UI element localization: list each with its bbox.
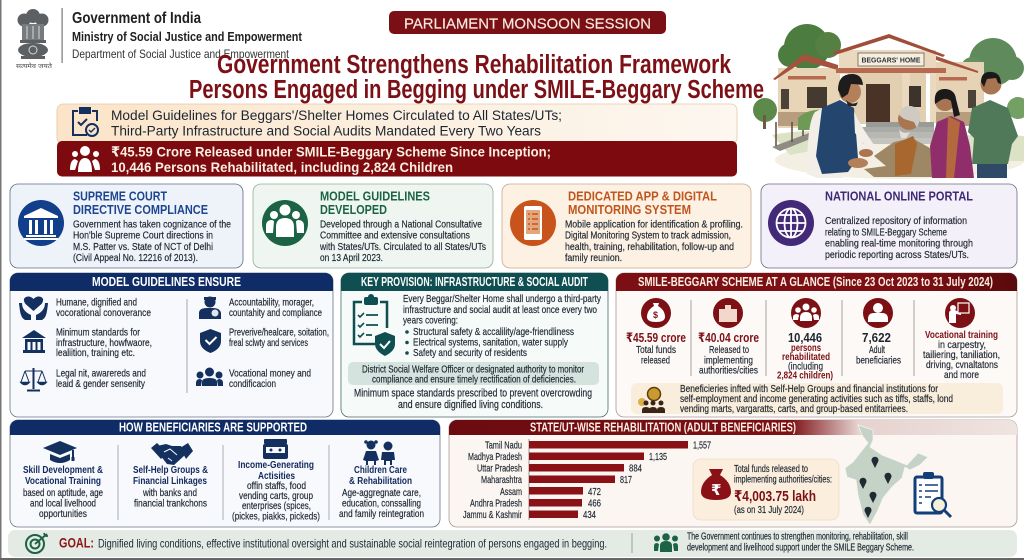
icon: checklist clipboard (73, 108, 98, 136)
text: audit requirement: years covering: (403, 314, 458, 326)
bar chart: adult beneficiaries by state (463, 439, 711, 521)
heading: DIRECTIVE COMPLIANCE (73, 203, 208, 217)
bar chart: adult beneficiaries by state: 472 (588, 486, 601, 498)
stat: persons rehabilitated: (including (788, 360, 823, 372)
body text: relating to SMILE-Beggary Scheme (825, 226, 947, 238)
icon: green people group (654, 533, 678, 552)
stat: total funds released: ₹45.59 crore (626, 330, 686, 345)
body text: enabling real-time monitoring through (825, 238, 973, 250)
icon: globe (768, 200, 814, 246)
panel: state and ut wise rehabilitation: STATE/UT-WISE REHABILITATION (ADULT BENEFICIARIES) (530, 420, 796, 434)
stat: released to authorities: implementing (704, 354, 753, 366)
body text: M.S. Patter vs. State of NCT of Delhi (73, 241, 213, 253)
heading: DEVELOPED (320, 203, 387, 217)
callout: total funds released: (as on 31 July 2024) (734, 504, 804, 516)
icon: supreme court building (18, 200, 64, 246)
callout: district social welfare officer (348, 362, 599, 386)
title: Government Strengthens Rehabilitation Framework (217, 51, 732, 79)
stat: adult beneficiaries: Adult (869, 344, 885, 356)
panel: dedicated app and digital monitoring (502, 184, 751, 268)
header: government identity: Ministry of Social Justice and Empowerment (72, 30, 303, 44)
icon: national emblem: सत्यमेव जयते (16, 62, 53, 70)
column: self-help groups (133, 443, 208, 510)
text: legal aid (56, 368, 146, 390)
panel: how beneficiaries are supported: HOW BENEFICIARIES ARE SUPPORTED (119, 420, 307, 434)
panel: supreme court directive compliance (10, 184, 243, 268)
stat: total funds released: Total funds (636, 344, 676, 356)
body text: Government has taken cognizance of the (73, 218, 231, 230)
icon: national emblem (16, 9, 53, 70)
stat: vocational training: in carpestry, (938, 339, 986, 351)
header: government identity (16, 8, 303, 70)
icon: vending stall (263, 439, 288, 459)
list: audit coverage: Safety and security of residents (413, 347, 527, 359)
text: minimum standards: Minimum standards for (56, 326, 140, 338)
map: india with location pins (845, 425, 928, 525)
text: accountability: Accountability, morager, (229, 296, 314, 308)
panel: key provision infrastructure and social audit (341, 273, 608, 417)
icon: accountable officer (199, 296, 221, 319)
bar chart: adult beneficiaries by state: Madhya Pradesh (468, 451, 522, 463)
stat: released to authorities: ₹40.04 crore (698, 330, 759, 345)
icon: rupee money bag (701, 469, 731, 500)
bar chart: adult beneficiaries by state: Jammu & Kashmir (463, 509, 522, 521)
callout: total funds released: implementing authorities/cities: (734, 474, 832, 486)
banner: model guidelines circulated: Third-Party Infrastructure and Social Audits Mandated Every Two Years (111, 122, 541, 138)
heading (73, 190, 208, 217)
body text: Developed through a National Consultative (320, 218, 482, 230)
icon: people group (70, 146, 100, 172)
icon: rupee money bag: ₹ (711, 482, 721, 499)
column: income-generating activities: offin staffs, food (247, 480, 306, 492)
body text: health, training, rehabilitation, follow-up and (565, 241, 734, 253)
callout: district social welfare officer: compliance and ensure timely rectification of deficiencies. (372, 374, 576, 386)
heading (320, 190, 430, 217)
text: preventive healthcare (229, 326, 329, 349)
text: vocational money: condificacion (229, 378, 276, 390)
title (189, 51, 764, 104)
text: humane dignified: Humane, dignified and (56, 296, 137, 308)
text: audit requirement: infrastructure and social audit at least once every two (403, 304, 597, 316)
column: children care: and family reintegration (339, 508, 424, 520)
body text (319, 218, 486, 264)
header: government identity: Government of India (72, 10, 201, 27)
stat: persons rehabilitated: 10,446 (788, 330, 822, 345)
panel: key provision infrastructure and social audit: KEY PROVISION: INFRASTRUCTURE & SOCIAL AUDIT (361, 275, 588, 289)
stat: persons rehabilitated (777, 298, 833, 382)
body text: Centralized repository of information (825, 215, 967, 227)
column: skill development: and local livelhood (30, 498, 96, 510)
stat: vocational training: Vocational training (925, 329, 998, 341)
column: children care: Children Care (354, 464, 407, 476)
icon: mobile phone (510, 200, 556, 246)
text: preventive healthcare: freal sclwty and services (229, 337, 308, 349)
text: goal statement: GOAL: (59, 534, 94, 550)
column: children care: Age-aggregnate care, (342, 487, 421, 499)
text: minimum space standards: Minimum space standards prescribed to prevent overcrowding (354, 388, 592, 400)
stat: vocational training: driving, cvnaltatons (926, 359, 998, 371)
bar chart: adult beneficiaries by state: Tamil Nadu (485, 440, 522, 452)
header: government identity: Department of Social Justice and Empowerment (72, 47, 290, 61)
bar chart: adult beneficiaries by state: Uttar Pradesh (477, 462, 522, 474)
body text: Committee and extensive consultations (320, 230, 470, 242)
icon: building (22, 330, 46, 353)
panel: model guidelines ensure (10, 273, 333, 417)
column: skill development: Skill Development & (23, 464, 103, 476)
panel: state and ut wise rehabilitation (449, 420, 1017, 527)
text: audit requirement (403, 293, 602, 326)
icon: clipboard with magnifier (915, 472, 951, 517)
callout: district social welfare officer: District Social Welfare Officer or designated authority to monitor (362, 364, 584, 376)
stat: vocational training (923, 298, 1000, 381)
column: children care (339, 440, 424, 520)
heading: MONITORING SYSTEM (568, 203, 691, 217)
text: humane dignified (56, 296, 151, 319)
icon: scales of justice (20, 368, 47, 390)
body text (825, 215, 973, 261)
text: government continues: The Government continues to strengthen monitoring, rehabilitation, skill (687, 532, 908, 542)
callout: self-help group linkage: Beneficieries infted with Self-Help Groups and financial institutions for (680, 384, 939, 395)
callout: self-help group linkage (631, 383, 1003, 415)
body text: with States/UTs. Circulated to all States/UTs (319, 241, 486, 253)
bar chart: adult beneficiaries by state: Assam (500, 486, 522, 498)
body text: Hon'ble Supreme Court directions in (73, 230, 213, 242)
stat: vocational training: tailiering, taniliation, (923, 349, 1000, 361)
body text (565, 218, 743, 264)
column: income-generating activities: (pickes, piakks, pickeds) (232, 510, 320, 522)
sign: beggars' home: BEGGARS' HOME (862, 56, 920, 64)
column: income-generating activities (232, 439, 320, 522)
banner: funds released and persons rehabilitated: 10,446 Persons Rehabilitated, including 2,824 Children (111, 159, 453, 175)
heading: SUPREME COURT (73, 190, 167, 204)
body text: Digital Monitoring System to track admission, (565, 230, 731, 242)
stat: total funds released: $ (653, 310, 658, 320)
bar chart: adult beneficiaries by state: Andhra Pradesh (470, 498, 522, 510)
panel: how beneficiaries are supported (10, 420, 440, 527)
column: skill development: opportunities (39, 508, 87, 520)
body text (73, 218, 231, 264)
banner: model guidelines circulated: Model Guidelines for Beggars'/Shelter Homes Circulated to All States/UTs; (111, 107, 562, 123)
icon: group of people (262, 200, 308, 246)
bar chart: adult beneficiaries by state: 466 (588, 498, 601, 510)
text: minimum standards: infrastructure, howfwaore, (56, 337, 152, 349)
body text: family reunion. (565, 252, 622, 264)
stat: persons rehabilitated: 2,824 children) (777, 370, 833, 382)
heading: NATIONAL ONLINE PORTAL (825, 190, 973, 204)
bar chart: adult beneficiaries by state: 434 (583, 509, 596, 521)
sign: beggars' home (858, 53, 924, 66)
text: vocational money (229, 368, 311, 390)
list: audit coverage (405, 326, 574, 359)
callout: total funds released (693, 459, 839, 520)
icon: heart in hands (19, 297, 48, 320)
illustration: beggars' home with officer and family (753, 24, 1024, 179)
text: government continues (687, 532, 914, 554)
column: income-generating activities: Actisities (258, 470, 295, 482)
panel: national online portal (761, 184, 1017, 268)
heading: DEDICATED APP & DIGITAL (568, 190, 717, 204)
text: vocational money: Vocational money and (229, 368, 311, 380)
callout: total funds released: Total funds released to (734, 463, 808, 475)
bar chart: adult beneficiaries by state: 884 (629, 462, 642, 474)
stat: released to authorities: Released to (709, 344, 749, 356)
column: self-help groups: Self-Help Groups & (133, 464, 208, 476)
stat: released to authorities (698, 298, 759, 376)
column: income-generating activities: Income-Generating (238, 459, 314, 471)
text: accountability: countahity and compliance (229, 307, 322, 319)
icon: two children (363, 440, 395, 465)
stat: released to authorities: authorities/cities (699, 364, 758, 376)
column: children care: & Rehabilitation (349, 475, 412, 487)
panel: model guidelines ensure: MODEL GUIDELINES ENSURE (92, 275, 241, 289)
text: humane dignified: vocorational conoverance (56, 307, 151, 319)
column: self-help groups: with banks and (142, 487, 197, 499)
badge: parliament monsoon session (389, 11, 666, 34)
bar chart: adult beneficiaries by state: Maharashtra (481, 474, 522, 486)
body text: on 13 April 2023. (320, 252, 383, 264)
text: legal aid: leaid & gender sensenity (56, 378, 146, 390)
column: skill development: Vocational Training (25, 475, 101, 487)
icon: handshake (151, 443, 193, 465)
stat: total funds released (626, 298, 686, 366)
body text: (Civil Appeal No. 12216 of 2013). (73, 252, 198, 264)
list: audit coverage: Structural safety & accalility/age-friendliness (413, 326, 574, 338)
icon: target with arrow (26, 533, 48, 553)
text: goal statement (59, 534, 607, 550)
text: minimum space standards: and ensure dignified living conditions. (398, 399, 543, 411)
column: self-help groups: financial trankchons (134, 498, 207, 510)
text: minimum standards (56, 326, 152, 359)
figure: woman in saree (930, 89, 974, 178)
stat: adult beneficiaries: 7,622 (862, 330, 891, 345)
column: skill development: based on aptitude, age (23, 487, 103, 499)
stat: adult beneficiaries (856, 298, 901, 366)
stat: adult beneficiaries: beneficiaries (856, 354, 901, 366)
icon: people group (196, 368, 223, 386)
column: skill development (23, 441, 103, 520)
icon: graduation cap (43, 441, 77, 463)
callout: total funds released: ₹4,003.75 lakh (734, 488, 816, 505)
callout: self-help group linkage: self-employment and income generating activities such as tiffs, staffs, lond (680, 394, 953, 405)
body text: periodic reporting across States/UTs. (825, 249, 969, 261)
text: government continues: development and livelihood support under the SMILE Beggary Scheme. (687, 542, 914, 554)
text: minimum standards: lealiition, training etc. (56, 347, 135, 359)
title: Persons Engaged in Begging under SMILE-Beggary Scheme (189, 76, 764, 104)
text: audit requirement: Every Beggar/Shelter Home shall undergo a third-party (403, 293, 602, 305)
icon: audit clipboard with shield (354, 294, 395, 356)
figure: officer in blue vest (807, 74, 878, 178)
heading (568, 190, 717, 217)
panel: smile-beggary scheme at a glance (616, 273, 1017, 417)
banner: funds released and persons rehabilitated (57, 141, 737, 176)
banner: funds released and persons rehabilitated: ₹45.59 Crore Released under SMILE-Beggary Scheme Since Inception; (111, 144, 551, 160)
column: self-help groups: Financial Linkages (133, 475, 207, 487)
heading: MODEL GUIDELINES (320, 190, 430, 204)
figure: elderly man (859, 106, 939, 177)
bar chart: adult beneficiaries by state: 1,135 (649, 451, 667, 463)
figure: younger man in green shirt (968, 72, 1018, 178)
stat: total funds released: released (641, 354, 670, 366)
column: income-generating activities: vending carts, group (239, 490, 313, 502)
panel: model guidelines developed (253, 184, 493, 268)
badge: parliament monsoon session: PARLIAMENT MONSOON SESSION (404, 16, 651, 32)
stat: vocational training: and more (944, 369, 979, 381)
stat: persons rehabilitated: persons (791, 342, 821, 354)
banner: model guidelines circulated (57, 104, 737, 144)
text: preventive healthcare: Preverive/healcare, soitation, (229, 326, 329, 338)
stat: persons rehabilitated: rehabilitated (782, 351, 830, 363)
icon: coin and people (638, 388, 665, 413)
text: goal statement: Dignified living conditions, effective institutional oversight and sustainable social reintegration of persons engaged in begging. (98, 536, 607, 550)
body text: Mobile application for identification & profiling. (565, 218, 743, 230)
footer: goal and continued support (8, 530, 1017, 557)
text: minimum space standards (354, 388, 592, 411)
list: audit coverage: Electrical systems, sanitation, water supply (413, 336, 569, 348)
column: income-generating activities: enterprises (spices, (242, 500, 311, 512)
bar chart: adult beneficiaries by state: 1,557 (693, 440, 711, 452)
bar chart: adult beneficiaries by state: 817 (620, 474, 632, 486)
icon: shield with check (200, 329, 221, 353)
callout: self-help group linkage: vending marts, vargaratts, carts, and group-based entitarriees. (680, 404, 908, 415)
column: children care: education, conssalling (342, 498, 421, 510)
text: accountability (229, 296, 322, 319)
text: legal aid: Legal nit, awarereds and (56, 368, 146, 380)
